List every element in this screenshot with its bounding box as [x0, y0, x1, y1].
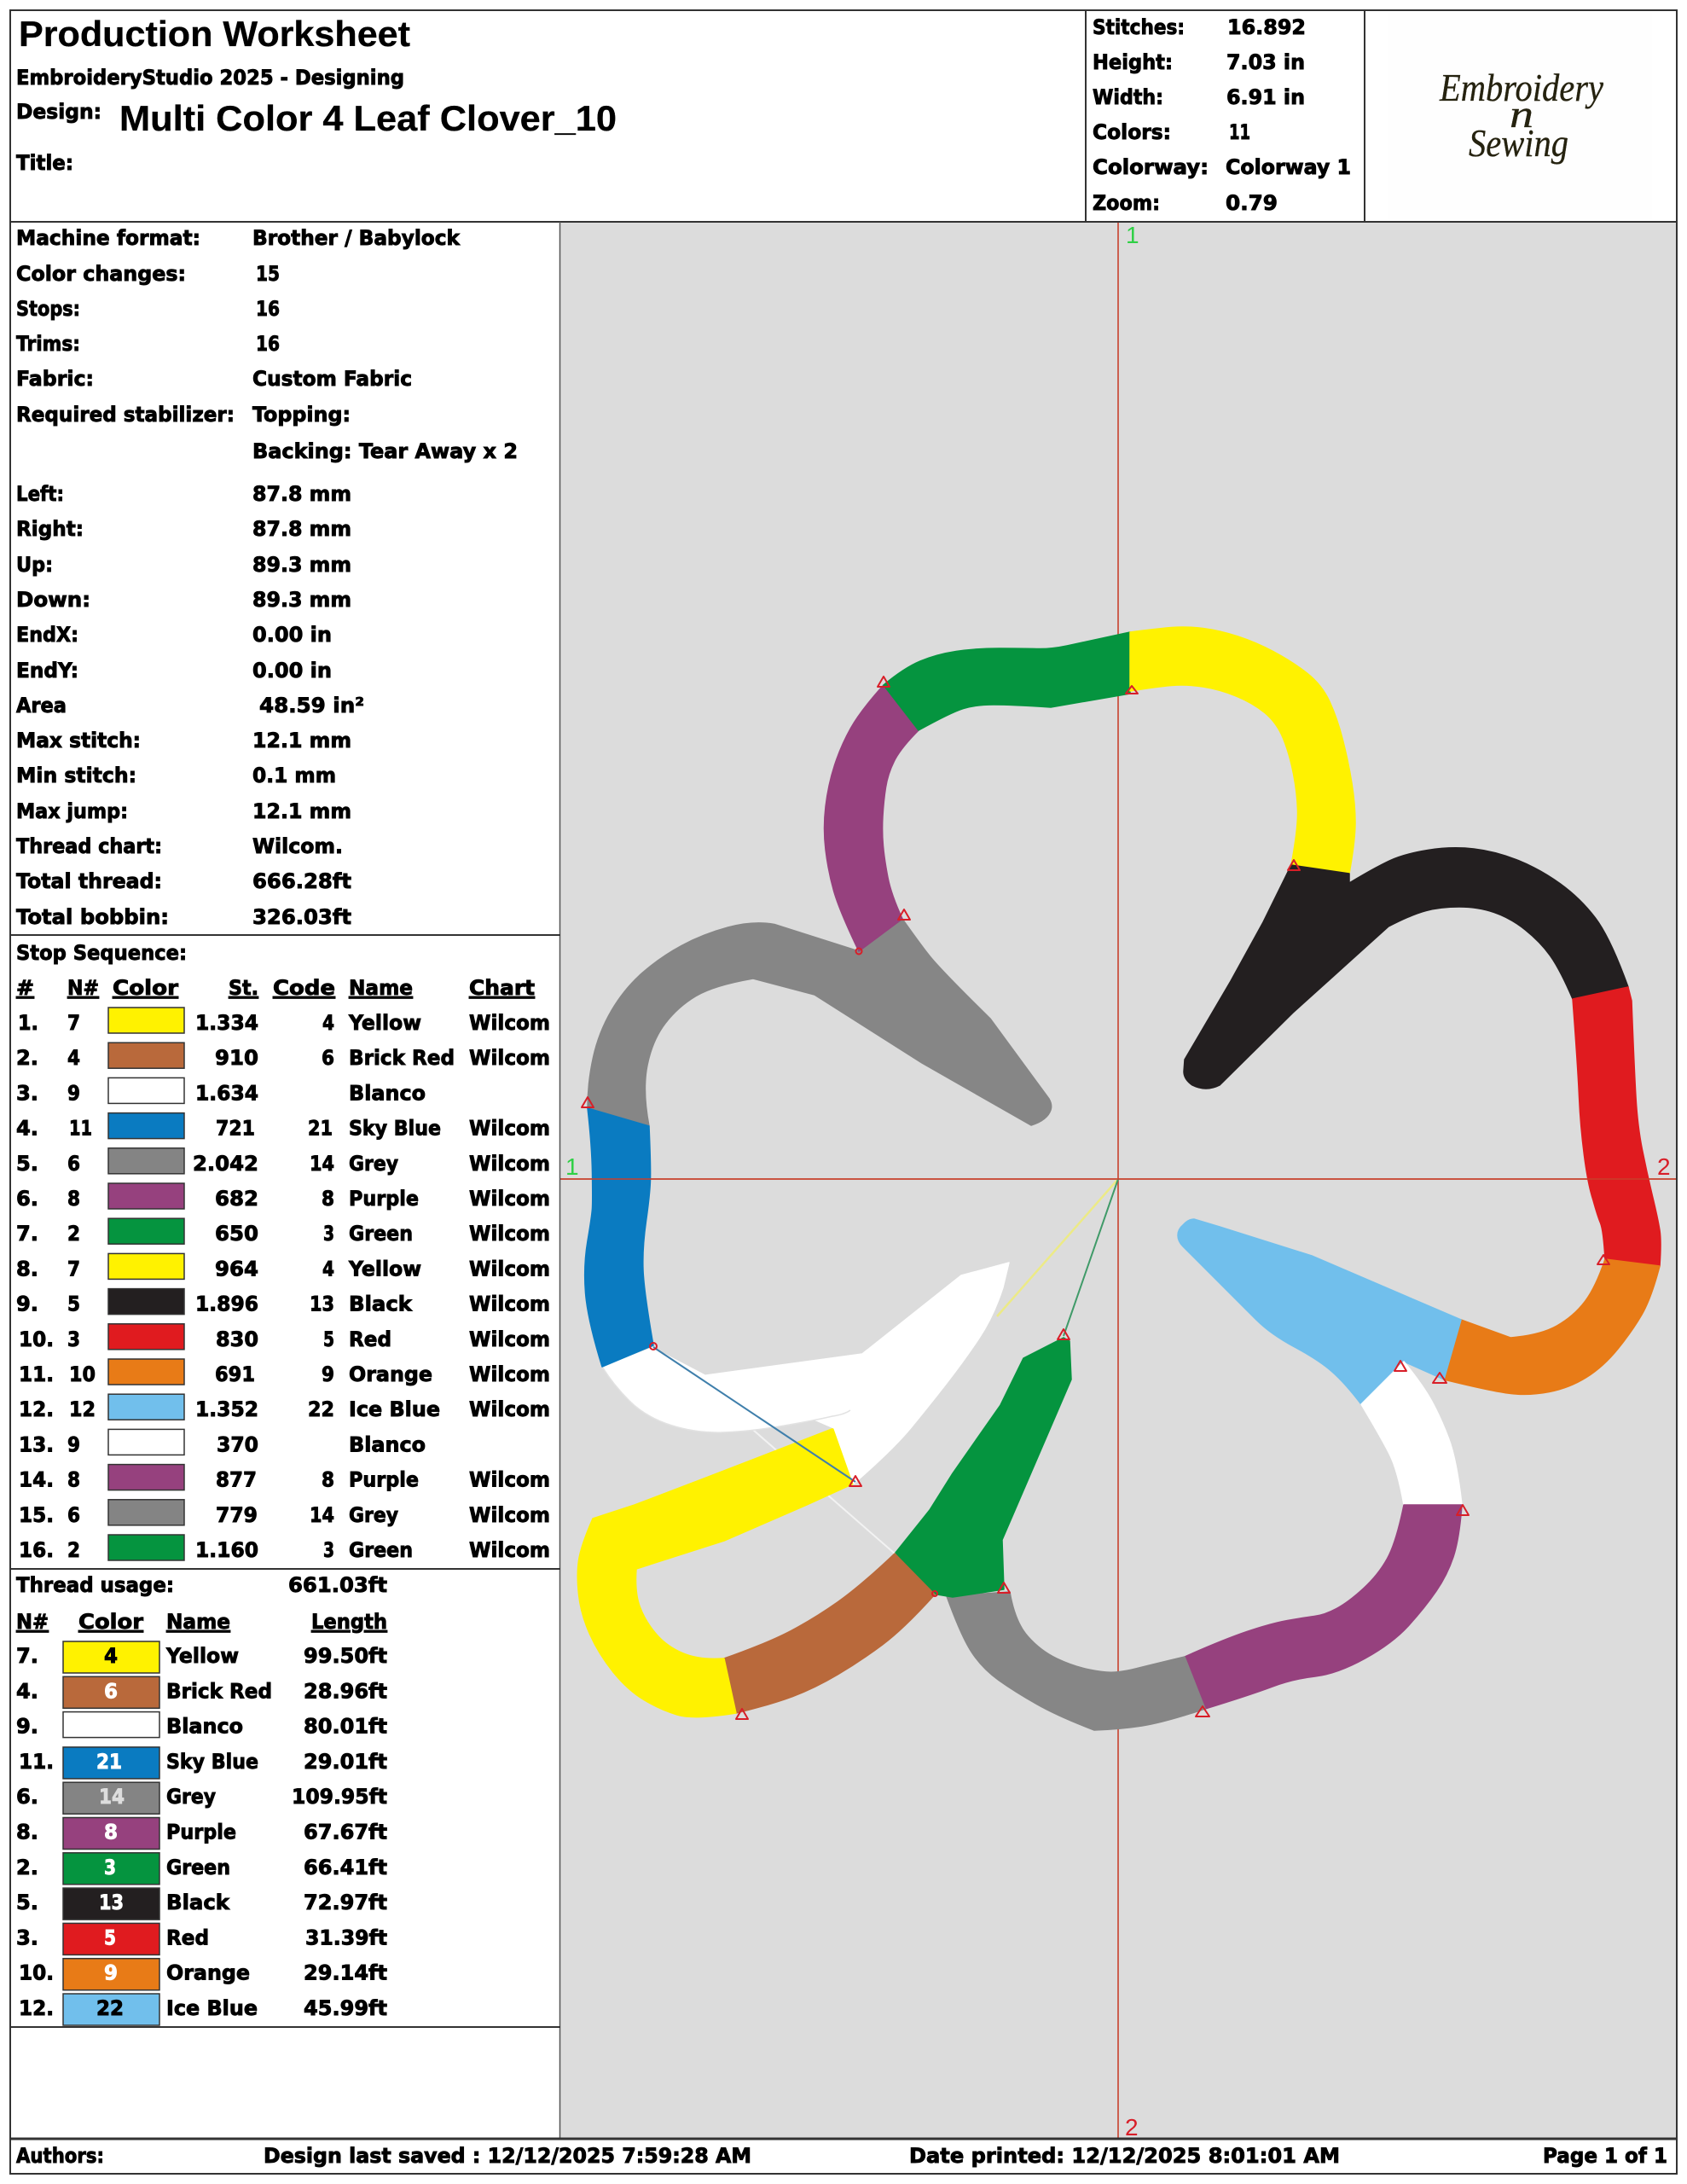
thread usage heading: 661.03ft	[288, 1573, 387, 1597]
row 8: 964	[215, 1257, 258, 1281]
thread row: Orange	[19, 1959, 387, 1990]
row 9: 5	[67, 1292, 80, 1316]
title: Production Worksheet	[19, 14, 410, 54]
thread row: Green: 3	[104, 1856, 116, 1879]
clover design	[560, 627, 1677, 1730]
row 16: 2	[67, 1538, 80, 1562]
panel: header left	[10, 10, 1086, 222]
segment: white leaf	[706, 1263, 1009, 1484]
row 13: 13.	[19, 1432, 54, 1456]
segment: orange	[1444, 1259, 1660, 1394]
thread row: Blanco: Blanco	[166, 1715, 243, 1739]
row 11: 10	[69, 1362, 96, 1386]
thread row: Purple: 8.	[16, 1821, 38, 1844]
row 6: 8	[322, 1187, 334, 1211]
thread row: Grey: 14	[99, 1785, 125, 1809]
panel: machine and design details: Left:	[16, 482, 64, 506]
row 11: Orange	[349, 1362, 432, 1386]
segment: green lower	[896, 1338, 1071, 1597]
row 15: Wilcom	[469, 1503, 550, 1527]
row 9: Wilcom	[469, 1292, 550, 1316]
row 2: 910	[215, 1046, 258, 1070]
row 6	[16, 1183, 550, 1211]
row 3: 9	[67, 1081, 80, 1105]
thread row: Purple: 8	[104, 1821, 118, 1844]
thread row: Sky Blue: 21	[96, 1750, 122, 1774]
thread row: Red: 31.39ft	[305, 1926, 387, 1949]
panel: machine and design details: Required stabilizer:	[16, 403, 235, 427]
thread row: Brick Red: 28.96ft	[304, 1679, 387, 1703]
row 10	[19, 1324, 550, 1351]
row 4: 21	[308, 1117, 333, 1141]
row 10: 5	[323, 1327, 334, 1351]
panel: machine and design details: Color changes:	[16, 262, 186, 286]
panel: machine and design details: EndX:	[16, 623, 78, 647]
row 5: 6	[67, 1152, 80, 1176]
panel: machine and design details: 87.8 mm	[252, 482, 351, 506]
thread usage heading	[16, 1573, 387, 1597]
row 11	[19, 1359, 550, 1386]
row 10: 10.	[19, 1327, 54, 1351]
thread row: Orange: 29.14ft	[304, 1961, 387, 1985]
row 10: 3	[67, 1327, 80, 1351]
thread row: Yellow: 7.	[16, 1644, 38, 1668]
thread row: Ice Blue: 12.	[19, 1996, 54, 2020]
row 8	[16, 1253, 550, 1281]
panel: header stats: Width:	[1093, 85, 1163, 109]
panel: header stats: Colorway 1	[1226, 155, 1351, 179]
panel: machine and design details: Backing: Tear Away x 2	[252, 439, 518, 463]
row 6: 6.	[16, 1187, 38, 1211]
thread table header: N#	[16, 1610, 49, 1634]
panel: header stats: Stitches:	[1093, 15, 1185, 39]
row 2	[16, 1043, 550, 1070]
row 5: 5.	[16, 1152, 38, 1176]
row 5: 2.042	[193, 1152, 258, 1176]
segment: ice blue	[1178, 1219, 1461, 1404]
row 4: 11	[69, 1117, 92, 1141]
panel: machine and design details: Area	[16, 694, 67, 717]
panel: header stats: 0.79	[1226, 191, 1278, 215]
segment: red	[1573, 987, 1661, 1266]
row 1: 4	[322, 1011, 334, 1035]
panel: design preview canvas	[560, 222, 1677, 2140]
panel: machine and design details: Right:	[16, 517, 84, 541]
row 9: 13	[310, 1292, 334, 1316]
row 7: 650	[215, 1222, 258, 1246]
panel: machine and design details: 89.3 mm	[252, 553, 351, 577]
panel: machine and design details: Wilcom.	[252, 834, 343, 858]
row 8: 4	[322, 1257, 334, 1281]
row 12: Wilcom	[469, 1397, 550, 1421]
row 3	[16, 1077, 426, 1105]
thread row: Yellow: 4	[104, 1644, 118, 1668]
panel: header stats: 16.892	[1227, 15, 1306, 39]
thread row: Grey: Grey	[166, 1785, 216, 1809]
panel: header stats: Colorway:	[1093, 155, 1209, 179]
thread row: Blanco: 9.	[16, 1715, 38, 1739]
row 13: 9	[67, 1432, 80, 1456]
thread row: Ice Blue	[19, 1994, 387, 2025]
panel: machine and design details: Brother / Babylock	[252, 226, 461, 250]
segment: white arc	[602, 1347, 870, 1432]
thread row: Black: 13	[99, 1891, 124, 1914]
thread row: Orange: 10.	[19, 1961, 54, 1985]
table header: Chart	[469, 976, 535, 1000]
thread row: Yellow: Yellow	[165, 1644, 239, 1668]
row 11: 691	[215, 1362, 255, 1386]
panel: machine and design details: Max stitch:	[16, 729, 141, 752]
thread row: Sky Blue: Sky Blue	[166, 1750, 258, 1774]
row 3: 1.634	[195, 1081, 258, 1105]
panel: header stats: 11	[1229, 120, 1250, 144]
thread row: Brick Red	[16, 1676, 387, 1708]
segment: grey lower	[947, 1592, 1205, 1730]
row 15: 6	[67, 1503, 80, 1527]
row 9: 1.896	[195, 1292, 258, 1316]
row 6: Wilcom	[469, 1187, 550, 1211]
row 3: Blanco	[349, 1081, 426, 1105]
row 15: 15.	[19, 1503, 54, 1527]
segment: sky blue	[585, 1108, 653, 1367]
panel: header stats: Height:	[1093, 50, 1173, 74]
panel: header stats: 7.03 in	[1226, 50, 1305, 74]
thread row: Ice Blue: 22	[96, 1996, 124, 2020]
thread row: Black: Black	[166, 1891, 230, 1914]
panel: machine and design details: Down:	[16, 588, 90, 612]
thread row: Red: Red	[166, 1926, 209, 1949]
row 11: 9	[322, 1362, 334, 1386]
row 8: 8.	[16, 1257, 38, 1281]
jump stitch: blue line	[653, 1347, 855, 1482]
table header: N#	[67, 976, 99, 1000]
thread row: Grey: 109.95ft	[292, 1785, 387, 1809]
row 12: 12.	[19, 1397, 54, 1421]
row 16: 1.160	[195, 1538, 258, 1562]
row 16: 3	[323, 1538, 334, 1562]
segment: white lower right	[1361, 1362, 1462, 1505]
row 2: 4	[67, 1046, 80, 1070]
panel: machine and design details: Custom Fabric	[252, 367, 412, 391]
panel: footer	[16, 2144, 1667, 2168]
row 16	[19, 1535, 550, 1562]
row 12: 12	[69, 1397, 96, 1421]
panel: machine and design details: 16	[256, 297, 280, 321]
segment: grey top leaf	[588, 919, 1052, 1126]
row 9: 9.	[16, 1292, 38, 1316]
panel: stop sequence table	[16, 941, 550, 1562]
panel: machine and design details: Max jump:	[16, 799, 128, 823]
row 10: Red	[349, 1327, 391, 1351]
row 10: 830	[216, 1327, 258, 1351]
row 14	[19, 1465, 550, 1492]
row 1: 1.334	[195, 1011, 258, 1035]
panel: machine and design details: Up:	[16, 553, 53, 577]
row 5: Wilcom	[469, 1152, 550, 1176]
thread row: Blanco	[16, 1712, 387, 1739]
row 5: Grey	[349, 1152, 398, 1176]
row 7: 3	[323, 1222, 334, 1246]
logo: Embroidery n Sewing: n	[1510, 92, 1533, 136]
row 7: 7.	[16, 1222, 38, 1246]
panel: footer: Date printed: 12/12/2025 8:01:01 AM	[909, 2144, 1340, 2168]
row 12: Ice Blue	[349, 1397, 440, 1421]
row 2: Brick Red	[349, 1046, 455, 1070]
thread row: Red	[16, 1923, 387, 1955]
segment: brick red	[724, 1554, 935, 1713]
row 3: 3.	[16, 1081, 38, 1105]
axis label: right 2: 2	[1657, 1153, 1671, 1180]
thread row: Grey: 6.	[16, 1785, 38, 1809]
row 7	[16, 1218, 550, 1246]
segment: green top	[884, 632, 1130, 730]
row 14: Wilcom	[469, 1468, 550, 1492]
thread row: Purple: Purple	[166, 1821, 236, 1844]
panel: machine and design details: 48.59 in²	[259, 694, 364, 717]
panel: header stats	[1093, 15, 1351, 215]
panel: footer: Design last saved : 12/12/2025 7:59:28 AM	[264, 2144, 751, 2168]
panel: machine and design details: Fabric:	[16, 367, 94, 391]
thread table header: Name	[166, 1610, 230, 1634]
stop markers	[582, 677, 1609, 1719]
axis label: bottom 2: 2	[1125, 2114, 1139, 2140]
panel: machine and design details: 89.3 mm	[252, 588, 351, 612]
row 13: Blanco	[349, 1432, 426, 1456]
row 13: 370	[217, 1432, 258, 1456]
panel: footer: Authors:	[16, 2144, 104, 2168]
panel: header stats: 6.91 in	[1226, 85, 1305, 109]
logo: Embroidery n Sewing: Embroidery	[1439, 66, 1604, 109]
logo: Embroidery n Sewing: Sewing	[1469, 121, 1568, 165]
row 15: 14	[310, 1503, 334, 1527]
thread row: Purple: 67.67ft	[304, 1821, 387, 1844]
row 6: Purple	[349, 1187, 419, 1211]
thread row: Green	[16, 1853, 387, 1885]
thread table header: Color	[78, 1610, 143, 1634]
row 4: Sky Blue	[349, 1117, 441, 1141]
row 8: Wilcom	[469, 1257, 550, 1281]
panel: machine and design details: Trims:	[16, 332, 80, 356]
row 5: 14	[310, 1152, 334, 1176]
row 1: 1.	[18, 1011, 38, 1035]
row 1: Yellow	[348, 1011, 421, 1035]
jump stitch lines	[753, 1179, 1118, 1554]
thread row: Green: Green	[166, 1856, 230, 1879]
row 7: Green	[349, 1222, 413, 1246]
row 2: 2.	[16, 1046, 38, 1070]
panel: header stats: Zoom:	[1093, 191, 1160, 215]
row 11: Wilcom	[469, 1362, 550, 1386]
panel: machine and design details: Total thread:	[16, 869, 162, 893]
thread row: Black: 72.97ft	[304, 1891, 387, 1914]
panel: header stats: Colors:	[1093, 120, 1171, 144]
thread row: Brick Red: 6	[104, 1679, 118, 1703]
row 14: 8	[322, 1468, 334, 1492]
panel: machine and design details: 16	[256, 332, 280, 356]
axis label: left 1: 1	[565, 1153, 579, 1180]
row 14: 877	[216, 1468, 257, 1492]
thread row: Green: 66.41ft	[304, 1856, 387, 1879]
row 4: 721	[216, 1117, 255, 1141]
thread usage heading: Thread usage:	[16, 1573, 174, 1597]
thread row: Ice Blue: Ice Blue	[166, 1996, 258, 2020]
panel: machine and design details: Thread chart:	[16, 834, 162, 858]
row 8: 7	[67, 1257, 80, 1281]
row 7: 2	[67, 1222, 80, 1246]
stop sequence heading: Stop Sequence:	[16, 941, 187, 965]
subtitle: EmbroideryStudio 2025 - Designing	[16, 66, 404, 90]
panel: machine and design details: Topping:	[252, 403, 351, 427]
table header: Color	[113, 976, 178, 1000]
panel: footer: Page 1 of 1	[1543, 2144, 1667, 2168]
panel: machine and design details: Min stitch:	[16, 764, 136, 787]
row 9: Black	[349, 1292, 413, 1316]
thread row: Yellow	[16, 1641, 387, 1673]
design name: Multi Color 4 Leaf Clover_10	[119, 98, 617, 138]
segment: yellow top	[1130, 627, 1355, 874]
table header: Code	[273, 976, 335, 1000]
table header: St.	[229, 976, 258, 1000]
table header: Name	[349, 976, 413, 1000]
row 2: 6	[322, 1046, 334, 1070]
thread row: Brick Red: 4.	[16, 1679, 38, 1703]
row 2: Wilcom	[469, 1046, 550, 1070]
row 1: Wilcom	[469, 1011, 550, 1035]
row 1	[18, 1008, 550, 1035]
logo: Embroidery n Sewing	[1388, 12, 1652, 219]
thread row: Black: 5.	[16, 1891, 38, 1914]
row 12: 22	[308, 1397, 334, 1421]
centre axis over design	[560, 1178, 1677, 1180]
thread row: Red: 5	[104, 1926, 116, 1949]
row 4: Wilcom	[469, 1117, 550, 1141]
row 13	[19, 1429, 426, 1456]
row 8: Yellow	[348, 1257, 421, 1281]
thread row: Green: 2.	[16, 1856, 38, 1879]
row 15	[19, 1500, 550, 1527]
segment: purple top	[824, 685, 919, 951]
thread row: Red: 3.	[16, 1926, 38, 1949]
panel: machine and design details: EndY:	[16, 659, 78, 682]
panel: machine and design details: 87.8 mm	[252, 517, 351, 541]
thread row: Yellow: 99.50ft	[304, 1644, 387, 1668]
row 4: 4.	[16, 1117, 38, 1141]
panel: machine and design details: 0.1 mm	[252, 764, 336, 787]
panel: machine and design details: 666.28ft	[252, 869, 351, 893]
row 12: 1.352	[195, 1397, 258, 1421]
panel: machine and design details: 15	[256, 262, 280, 286]
thread row: Orange: Orange	[166, 1961, 250, 1985]
title label: Title:	[16, 151, 73, 175]
panel: machine and design details: Machine format:	[16, 226, 200, 250]
table header: #	[16, 976, 34, 1000]
row 12	[19, 1394, 550, 1421]
table header	[16, 976, 535, 1000]
panel: machine and design details	[16, 226, 518, 929]
row 15: Grey	[349, 1503, 398, 1527]
row 1: 7	[67, 1011, 80, 1035]
row 4	[16, 1113, 550, 1141]
axis label: top 1: 1	[1126, 222, 1139, 248]
thread table header: Length	[311, 1610, 387, 1634]
panel: machine and design details: Stops:	[16, 297, 80, 321]
thread row: Purple	[16, 1817, 387, 1850]
panel: thread usage table	[16, 1573, 387, 2025]
panel: machine and design details: 0.00 in	[252, 623, 332, 647]
row 14: Purple	[349, 1468, 419, 1492]
segment: yellow lower	[577, 1428, 854, 1717]
thread row: Orange: 9	[104, 1961, 118, 1985]
row 15: 779	[216, 1503, 258, 1527]
row 5	[16, 1148, 550, 1176]
thread row: Sky Blue	[19, 1747, 387, 1779]
design label: Design:	[16, 100, 101, 124]
row 7: Wilcom	[469, 1222, 550, 1246]
panel: machine and design details: 12.1 mm	[252, 729, 351, 752]
thread row: Sky Blue: 29.01ft	[304, 1750, 387, 1774]
row 11: 11.	[19, 1362, 54, 1386]
thread row: Brick Red: Brick Red	[166, 1679, 272, 1703]
panel: machine and design details: 326.03ft	[252, 905, 351, 929]
panel: machine and design details: Total bobbin:	[16, 905, 169, 929]
segment: black	[1184, 848, 1628, 1089]
row 16: Green	[349, 1538, 413, 1562]
row 6: 8	[67, 1187, 80, 1211]
thread row: Black	[16, 1888, 387, 1920]
row 9	[16, 1289, 550, 1316]
thread table header	[16, 1610, 387, 1634]
row 14: 8	[67, 1468, 80, 1492]
thread row: Grey	[16, 1782, 387, 1814]
segment: purple lower	[1185, 1505, 1462, 1709]
row 16: Wilcom	[469, 1538, 550, 1562]
thread row: Sky Blue: 11.	[19, 1750, 54, 1774]
thread row: Blanco: 80.01ft	[304, 1715, 387, 1739]
panel: machine and design details: 12.1 mm	[252, 799, 351, 823]
row 16: 16.	[19, 1538, 54, 1562]
row 14: 14.	[19, 1468, 54, 1492]
thread row: Ice Blue: 45.99ft	[304, 1996, 387, 2020]
row 10: Wilcom	[469, 1327, 550, 1351]
panel: machine and design details: 0.00 in	[252, 659, 332, 682]
row 6: 682	[215, 1187, 258, 1211]
